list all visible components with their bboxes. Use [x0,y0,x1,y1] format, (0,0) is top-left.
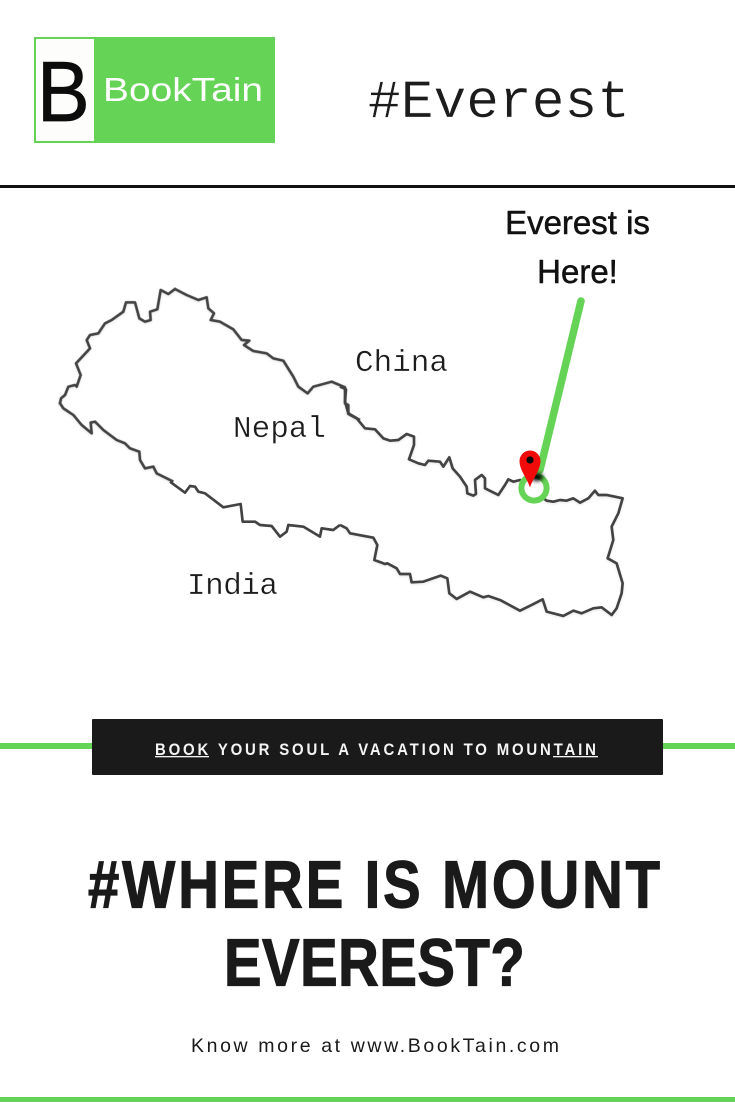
tagline text: BOOK YOUR SOUL A VACATION TO MOUNTAIN [155,741,596,759]
logo letter B: B [37,45,90,140]
label: China: China [355,346,448,381]
callout: Everest is Here!: Here! [537,253,618,290]
bottom green rule [0,1097,735,1102]
main title: EVEREST? [224,926,525,1001]
green band left [0,743,92,749]
label: Nepal: Nepal [233,412,326,447]
main title [88,848,660,1001]
map of Nepal [60,289,623,617]
heading: #Everest: #Everest [368,73,630,134]
footer link text: Know more at www.BookTain.com [191,1035,559,1057]
callout: Everest is Here! [505,204,650,290]
label: India: India [187,569,278,604]
arrow line from callout to location [540,301,581,470]
location ring [521,475,547,501]
icon: map pin [520,450,543,488]
main title: #WHERE IS MOUNT [88,848,660,923]
callout: Everest is Here!: Everest is [505,204,650,241]
green band right [663,743,735,749]
logo wordmark: BookTain [103,72,263,109]
logo: BookTain [34,37,275,143]
tagline banner [92,719,663,775]
